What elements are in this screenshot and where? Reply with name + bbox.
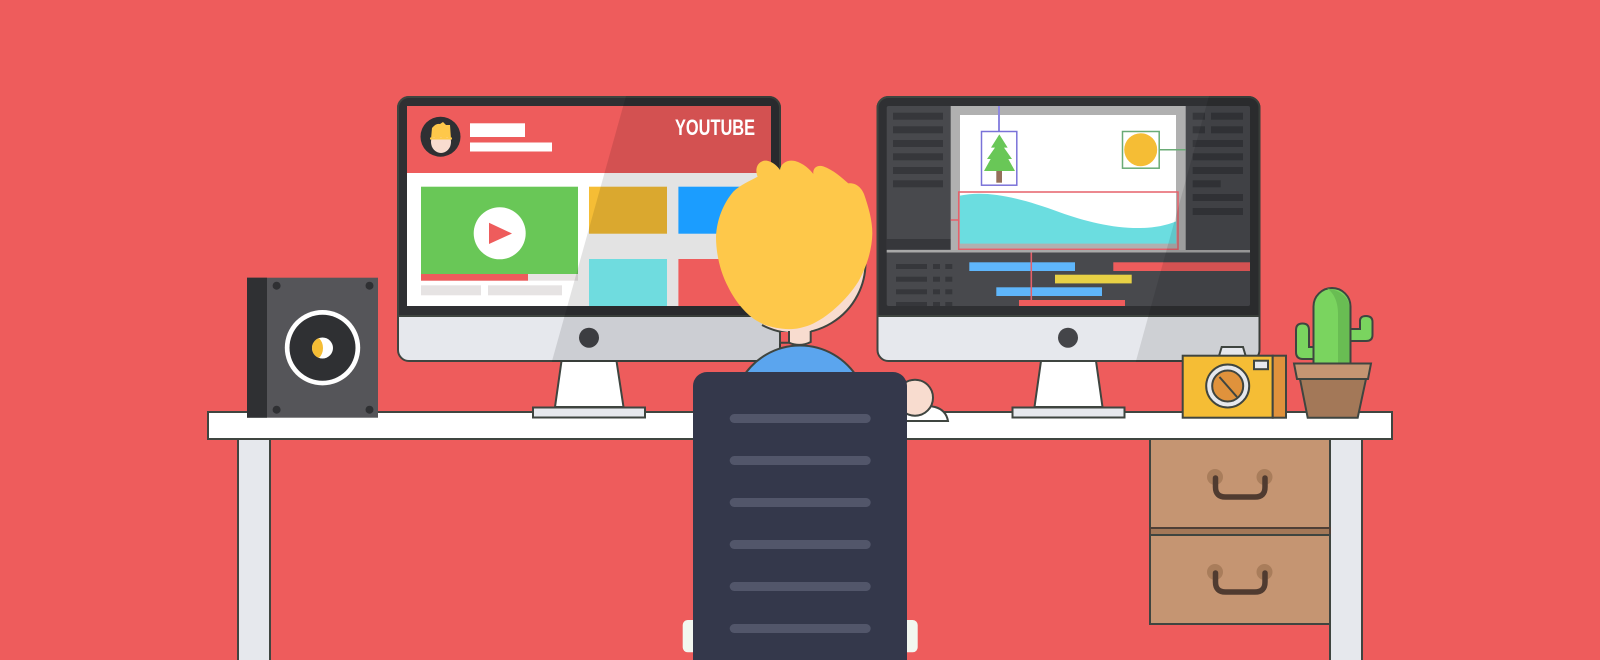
left monitor: YouTube <box>398 96 790 418</box>
chair back <box>693 372 907 660</box>
head outline <box>762 262 866 333</box>
cactus shade <box>1327 288 1350 363</box>
speaker side <box>247 278 267 418</box>
pot rim <box>1294 364 1371 379</box>
hair <box>716 161 872 329</box>
neck <box>780 330 811 345</box>
desk top <box>208 412 1392 439</box>
cactus plant <box>1294 288 1372 418</box>
viewfinder <box>1254 361 1268 369</box>
video tile: yellow <box>589 187 667 234</box>
channel name bars <box>470 123 552 152</box>
home button <box>1058 328 1078 348</box>
shutter button <box>1219 347 1246 356</box>
right monitor: video editor <box>878 96 1270 418</box>
main video thumbnail <box>421 187 578 274</box>
pot body <box>1300 379 1366 418</box>
chin and frame <box>398 97 780 361</box>
video meta bars <box>421 285 562 295</box>
desk <box>208 412 1392 660</box>
canvas <box>960 115 1176 243</box>
timeline divider <box>887 250 1250 252</box>
speaker cone <box>285 310 360 385</box>
person <box>716 161 948 421</box>
channel header <box>407 106 771 173</box>
title: YOUTUBE: YOUTUBE <box>675 115 755 140</box>
desk right leg <box>1330 439 1362 660</box>
stand <box>555 361 624 407</box>
right arm <box>1350 316 1372 341</box>
base <box>1012 408 1124 418</box>
cactus stem <box>1314 288 1350 364</box>
camera body <box>1183 356 1273 418</box>
sun layer <box>1122 132 1186 168</box>
screen <box>407 106 771 306</box>
home button <box>579 328 599 348</box>
shirt <box>741 346 859 380</box>
progress bar <box>421 274 578 281</box>
lower handle <box>1207 564 1272 592</box>
upper drawer <box>1150 439 1330 528</box>
wave layer <box>960 194 1176 244</box>
speaker body <box>247 278 378 418</box>
hand on mouse <box>897 380 948 421</box>
video tile: teal <box>589 259 667 306</box>
head <box>762 262 866 333</box>
drawers <box>1150 439 1330 624</box>
left tool panel <box>887 113 951 249</box>
drawer divider <box>1150 528 1330 535</box>
screen glare <box>1136 180 1260 360</box>
editor panel <box>887 106 1250 306</box>
playhead <box>1030 252 1032 300</box>
wave selection box <box>951 192 1178 300</box>
camera <box>1183 347 1286 418</box>
lower drawer <box>1150 535 1330 624</box>
tree layer <box>982 106 1017 185</box>
speaker <box>247 278 378 418</box>
play button <box>474 207 526 259</box>
bezel <box>878 97 1260 316</box>
avatar <box>420 117 460 157</box>
upper handle <box>1207 469 1272 497</box>
illustration: desk scene <box>207 96 1393 660</box>
video tile: blue <box>678 187 758 234</box>
left arm <box>1296 324 1314 359</box>
desk left leg <box>238 439 270 660</box>
chair casters <box>683 620 918 652</box>
screen glare <box>552 106 779 360</box>
video tile: red <box>678 259 758 306</box>
bezel <box>398 97 780 316</box>
right properties panel <box>1193 113 1243 215</box>
preview area <box>951 106 1186 250</box>
base <box>533 408 645 418</box>
chin and frame <box>878 97 1260 361</box>
speaker screws <box>273 282 374 414</box>
clips <box>969 262 1250 306</box>
track labels <box>896 264 952 307</box>
chair slats <box>730 414 871 633</box>
camera side <box>1273 356 1286 418</box>
lens <box>1206 364 1249 408</box>
timeline <box>896 252 1250 307</box>
stand <box>1034 361 1102 407</box>
